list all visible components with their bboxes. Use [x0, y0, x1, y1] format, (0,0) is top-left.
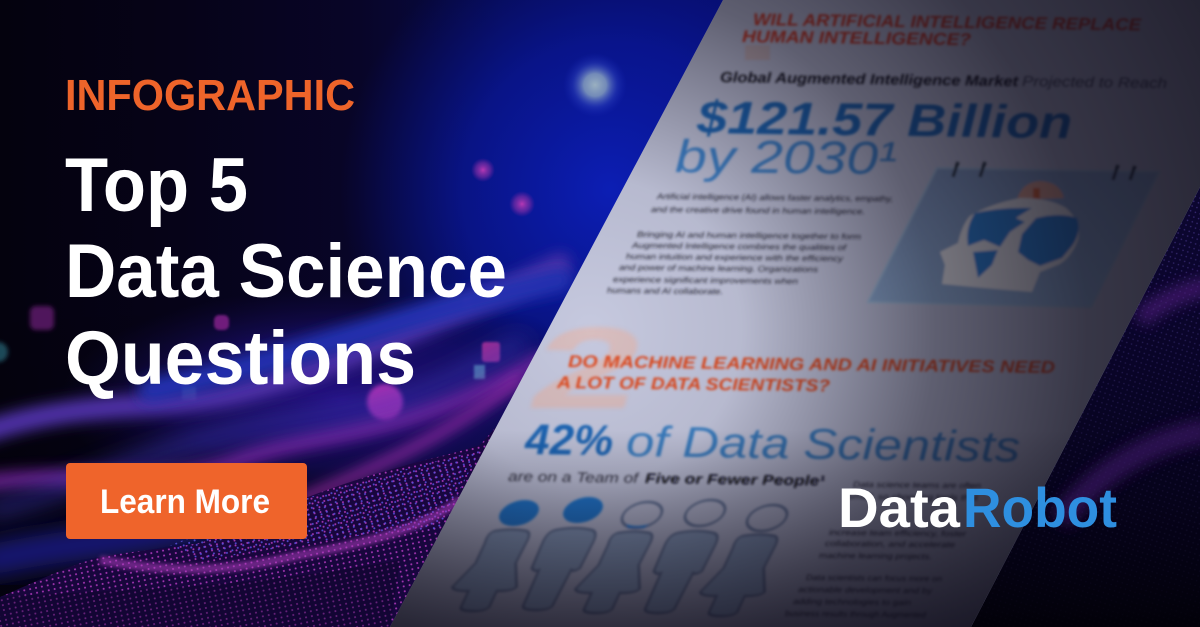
- statistic: $121.57 billion by 2030: $121.57 Billion: [696, 91, 1073, 148]
- section 2 heading: DO MACHINE LEARNING AND AI INITIATIVES NEED: [568, 352, 1055, 377]
- eyebrow: infographic: INFOGRAPHIC: [65, 71, 355, 120]
- statistic: $121.57 billion by 2030: by 2030¹: [675, 130, 897, 184]
- section 1 heading: HUMAN INTELLIGENCE?: [742, 27, 972, 49]
- title: [65, 143, 507, 401]
- section 1 market subheading: Projected to Reach: [1022, 74, 1167, 92]
- section 1 body copy: humans and AI collaborate.: [607, 286, 723, 296]
- section 1 market subheading: [719, 70, 1166, 90]
- person 3 partial: [574, 500, 664, 614]
- section 1 body copy: experience significant improvements when: [613, 275, 799, 286]
- section 2 body copy: [785, 480, 982, 619]
- section 2 body copy: collaboration, and accelerate: [825, 539, 956, 549]
- section 1 market subheading: Global Augmented Intelligence Market: [720, 70, 1019, 90]
- section 2 heading: [556, 352, 1055, 395]
- sheet paper: [380, 0, 1200, 627]
- person 5 outline: [699, 502, 790, 618]
- section 2 body copy: machine learning projects.: [819, 551, 932, 561]
- section 1 body copy: Augmented Intelligence combines the qualities of: [631, 241, 847, 252]
- section 2 body copy: increase team efficiency, foster: [829, 528, 966, 538]
- section 2 body copy: business results through Augmented: [785, 609, 927, 619]
- blurred infographic preview sheet: [380, 0, 1200, 627]
- title: Questions: [65, 316, 416, 401]
- person 1 filled: [451, 498, 540, 612]
- sheet vignette shading: [380, 0, 1200, 627]
- background: right side dotted mesh: [971, 187, 1200, 627]
- icon: calendar with human head and world map: [868, 162, 1159, 307]
- statistic: 42% of data scientists: 42%: [524, 416, 614, 465]
- statistic: $121.57 billion by 2030: [675, 91, 1073, 184]
- logo: DataRobot: Data: [838, 476, 961, 539]
- person 2 filled: [522, 495, 604, 612]
- section 1 heading: [741, 12, 1142, 46]
- button: learn more: Learn More: [100, 483, 270, 521]
- statistic: 42% of data scientists: of Data Scientists: [626, 418, 1020, 472]
- team size subheading: Five or Fewer People¹: [645, 470, 826, 489]
- background: glowing bokeh particles: [0, 53, 627, 420]
- team size subheading: [508, 468, 826, 489]
- logo: DataRobot: Robot: [963, 476, 1117, 539]
- section 2 body copy: Data scientists can focus more on: [806, 573, 943, 583]
- section 1 body copy: [607, 192, 893, 296]
- section 1 heading: WILL ARTIFICIAL INTELLIGENCE REPLACE: [753, 10, 1142, 34]
- section 1 faded number: [745, 45, 770, 60]
- background: dotted particle mesh: [0, 400, 520, 627]
- section 1 body copy: human intuition and experience with the efficiency: [626, 252, 844, 263]
- person 4 outline: [644, 498, 728, 614]
- section 1 body copy: Bringing AI and human intelligence together to form: [637, 230, 861, 241]
- section 2 body copy: adding technologies to gain: [793, 597, 912, 607]
- section 1 body copy: Artificial intelligence (AI) allows faster analytics, empathy,: [656, 192, 893, 203]
- section 2 body copy: Data science teams are often: [853, 480, 982, 490]
- section 1 body copy: and the creative drive found in human intelligence.: [651, 205, 865, 216]
- section 2 body copy: small, so choosing tools that: [848, 492, 979, 502]
- section 2 number: 2: [518, 303, 658, 433]
- team size subheading: are on a Team of: [508, 468, 641, 486]
- background: flowing purple light waves: [0, 265, 560, 560]
- section 2 body copy: actionable development and by: [798, 585, 933, 595]
- statistic: 42% of data scientists: [522, 422, 1020, 463]
- title: Data Science: [65, 229, 507, 314]
- title: Top 5: [65, 143, 248, 228]
- logo: DataRobot: [838, 476, 1117, 539]
- icon: row of five people: [441, 497, 805, 616]
- section 1 body copy: and power of machine learning. Organizations: [619, 263, 818, 274]
- button: learn more: [66, 463, 307, 539]
- section 2 heading: A LOT OF DATA SCIENTISTS?: [556, 373, 831, 395]
